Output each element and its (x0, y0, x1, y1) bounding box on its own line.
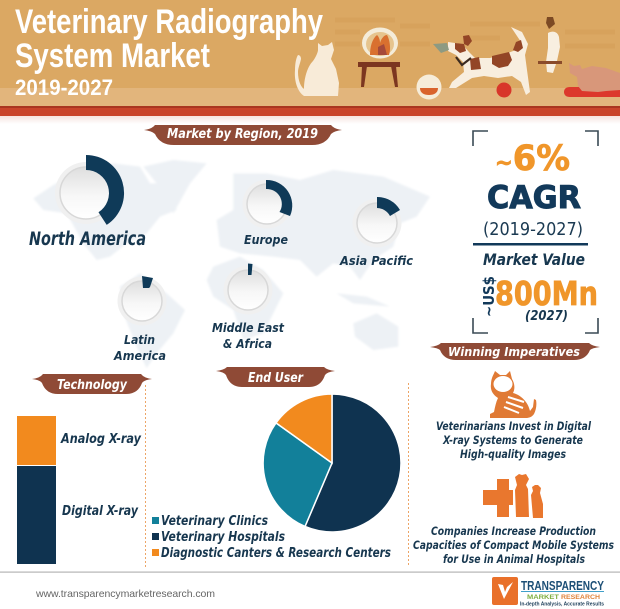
header banner (0, 0, 620, 124)
text: imperative one (436, 419, 592, 461)
text: imperative one: X-ray Systems to Generate (442, 433, 583, 447)
ribbon: Technology: Technology (57, 378, 127, 393)
stat: ~6%: ~6% (495, 139, 570, 179)
legend: end user: Diagnostic Canters & Research Centers (161, 546, 391, 561)
logo: Transparency Market Research: In-depth Analysis, Accurate Results (520, 602, 604, 608)
label: Middle East & Africa: Middle East (212, 321, 285, 335)
ribbon: Technology (32, 374, 152, 394)
ribbon: End User (216, 367, 335, 387)
label: Asia Pacific: Asia Pacific (339, 254, 413, 268)
ribbon: Market by Region: Market by Region, 2019 (167, 127, 318, 142)
illustration: parrot (538, 17, 562, 73)
footer url: www.transparencymarketresearch.com (35, 588, 215, 600)
donut: Middle East & Africa (212, 264, 285, 351)
title: Veterinary Radiography (15, 3, 323, 41)
logo: Transparency Market Research: RESEARCH (561, 594, 600, 601)
illustration: dog (433, 27, 530, 95)
donut: Latin America: America (113, 349, 166, 363)
stat: US$ rotated: ~US$ (480, 276, 498, 317)
ribbon: Market by Region (144, 125, 342, 145)
text: imperative two (413, 524, 614, 566)
label: Analog X-ray: Analog X-ray (60, 432, 141, 447)
logo: Transparency Market Research (492, 577, 604, 608)
panel: CAGR and market value (473, 131, 598, 333)
donut: Latin America (113, 276, 166, 363)
text: imperative one: High-quality Images (460, 447, 566, 461)
stat: CAGR: CAGR (487, 180, 581, 216)
donut: North America (29, 155, 146, 250)
donut: Europe (242, 180, 292, 247)
illustration: round bowl (416, 74, 442, 100)
icon: medical cross with dog and cat (483, 474, 543, 518)
stat: 800Mn: 800Mn (495, 274, 598, 313)
legend: end user (152, 514, 391, 561)
label: North America: North America (29, 229, 146, 250)
chart: technology stacked bar (17, 416, 141, 564)
label: Latin America: Latin (124, 333, 155, 347)
illustration: sleeping cat on cushion (564, 63, 620, 97)
illustration: red ball (496, 82, 512, 98)
logo: Transparency Market Research: MARKET (527, 594, 559, 601)
label: Digital X-ray: Digital X-ray (62, 504, 138, 519)
year 2027: (2027) (525, 309, 568, 324)
title: System Market (15, 37, 210, 75)
period: (2019-2027) (483, 219, 583, 240)
illustration: sitting cat (295, 42, 339, 96)
ribbon: Winning Imperatives: Winning Imperatives (448, 344, 580, 359)
ribbon: End User: End User (248, 371, 304, 386)
title (15, 3, 323, 100)
icon: cat x-ray (490, 371, 536, 418)
illustration: fish bowl on table (358, 28, 400, 87)
donut: Middle East & Africa: & Africa (223, 337, 272, 351)
legend: end user: Veterinary Hospitals (161, 530, 285, 545)
label: Europe: Europe (244, 233, 288, 247)
text: imperative two: for Use in Animal Hospitals (443, 552, 585, 566)
donut: Asia Pacific (339, 197, 413, 268)
market value label: Market Value (483, 250, 585, 269)
legend: end user: Veterinary Clinics (161, 514, 268, 529)
world map background (33, 160, 430, 368)
title: 2019-2027 (15, 75, 113, 100)
chart: end user pie (263, 394, 401, 532)
